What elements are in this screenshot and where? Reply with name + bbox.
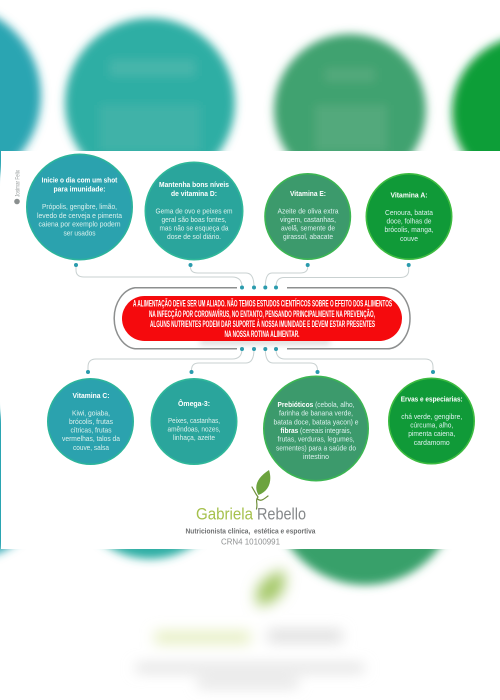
circle: ômega-3: linhaça, azeite — [173, 433, 215, 442]
circle: vitamina D: de vitamina D: — [171, 189, 217, 198]
logo: Gabriela Rebello: Gabriela — [196, 505, 253, 523]
circle: prebióticos e fibras: intestino — [303, 452, 329, 461]
circle: vitamina E: Azeite de oliva extra — [278, 206, 339, 215]
circle: prebióticos e fibras: fibras (cereais integrais, — [280, 426, 352, 435]
circle: vitamina E: Vitamina E: — [290, 189, 326, 198]
photo credit — [14, 169, 21, 204]
circle: ervas e especiarias: pimenta caiena, — [408, 429, 455, 438]
circle: ervas e especiarias: cardamomo — [414, 438, 450, 447]
circle: vitamina C: brócolis, frutas — [69, 417, 113, 426]
circle: vitamina D: geral são boas fontes, — [162, 215, 226, 224]
circle: prebióticos e fibras: farinha de banana verde, — [279, 409, 353, 418]
circle: vitamina A: brócolis, manga, — [384, 225, 434, 234]
circle: vitamina C: Kiwi, goiaba, — [72, 408, 110, 417]
connector lines: top — [74, 263, 411, 290]
circle: shot para imunidade: Inicie o dia com um shot — [42, 176, 118, 185]
circle: prebióticos e fibras: Prebióticos (cebola, alho, — [278, 400, 354, 409]
circle: ervas e especiarias: Ervas e especiarias: — [401, 395, 463, 404]
blurred background: enlarged bottom circles — [0, 399, 458, 585]
circle: shot para imunidade: caiena por exemplo podem — [38, 220, 120, 229]
central message pill — [114, 288, 410, 349]
circle: ômega-3: Ômega-3: — [178, 399, 210, 408]
photo credit: Josimar Felix — [14, 169, 21, 197]
circle: vitamina C: cítricas, frutas — [70, 426, 112, 435]
central message pill: NA NOSSA ROTINA ALIMENTAR. — [224, 329, 300, 339]
circle: vitamina C: Vitamina C: — [72, 391, 110, 400]
circle: vitamina E — [265, 174, 350, 259]
circle: ervas e especiarias: chá verde, gengibre, — [401, 412, 462, 421]
circle: vitamina D — [145, 162, 243, 260]
circle: ômega-3: Peixes, castanhas, — [168, 416, 220, 425]
connector lines: bottom — [86, 347, 435, 374]
circle: vitamina D: mas não se esqueça da — [160, 224, 229, 233]
circle: vitamina C: couve, salsa — [73, 443, 110, 452]
logo: Gabriela Rebello: Nutricionista clínica, estética e esportiva — [186, 527, 316, 536]
circle: shot para imunidade: levedo de cerveja e pimenta — [37, 211, 123, 220]
circle: vitamina A: Vitamina A: — [390, 191, 428, 200]
circle: vitamina A: couve — [400, 234, 418, 243]
circle: shot para imunidade: ser usados — [64, 228, 96, 237]
circle: vitamina D: Gema de ovo e peixes em — [156, 206, 232, 215]
blurred background: enlarged top circles — [0, 4, 500, 188]
circle: shot para imunidade: Própolis, gengibre, limão, — [42, 202, 117, 211]
circle: prebióticos e fibras: frutas, verduras, legumes, — [278, 435, 354, 444]
circle: vitamina C — [48, 379, 133, 464]
circle: vitamina E: girassol, abacate — [283, 232, 333, 241]
circle: vitamina E: virgem, castanhas, — [280, 215, 336, 224]
circle: vitamina E: avelã, semente de — [281, 224, 335, 233]
logo: Gabriela Rebello: Rebello — [257, 505, 306, 523]
circle: vitamina A — [366, 174, 452, 259]
circle: prebióticos e fibras: sementes) para a saúde do — [276, 443, 356, 452]
circle: ervas e especiarias — [389, 378, 474, 464]
logo: Gabriela Rebello: CRN4 10100991 — [221, 536, 280, 546]
white main panel — [1, 151, 500, 549]
circle: ômega-3: amêndoas, nozes, — [168, 425, 220, 434]
circle: shot para imunidade — [27, 154, 132, 260]
circle: shot para imunidade: para imunidade: — [54, 185, 106, 194]
circle: ervas e especiarias: cúrcuma, alho, — [410, 421, 453, 430]
circle: prebióticos e fibras: batata doce, batata yacon) e — [274, 417, 358, 426]
circle: vitamina D: Mantenha bons níveis — [159, 180, 229, 189]
circle: vitamina A: doce, folhas de — [386, 217, 432, 226]
circle: vitamina C: vermelhas, talos da — [62, 434, 121, 443]
circle: ômega-3 — [151, 379, 237, 464]
logo: Gabriela Rebello — [186, 470, 316, 546]
circle: vitamina D: dose de sol diário. — [167, 232, 221, 241]
circle: prebióticos e fibras — [264, 376, 368, 481]
blurred background: enlarged logo — [136, 570, 364, 687]
circle: vitamina A: Cenoura, batata — [385, 208, 434, 217]
